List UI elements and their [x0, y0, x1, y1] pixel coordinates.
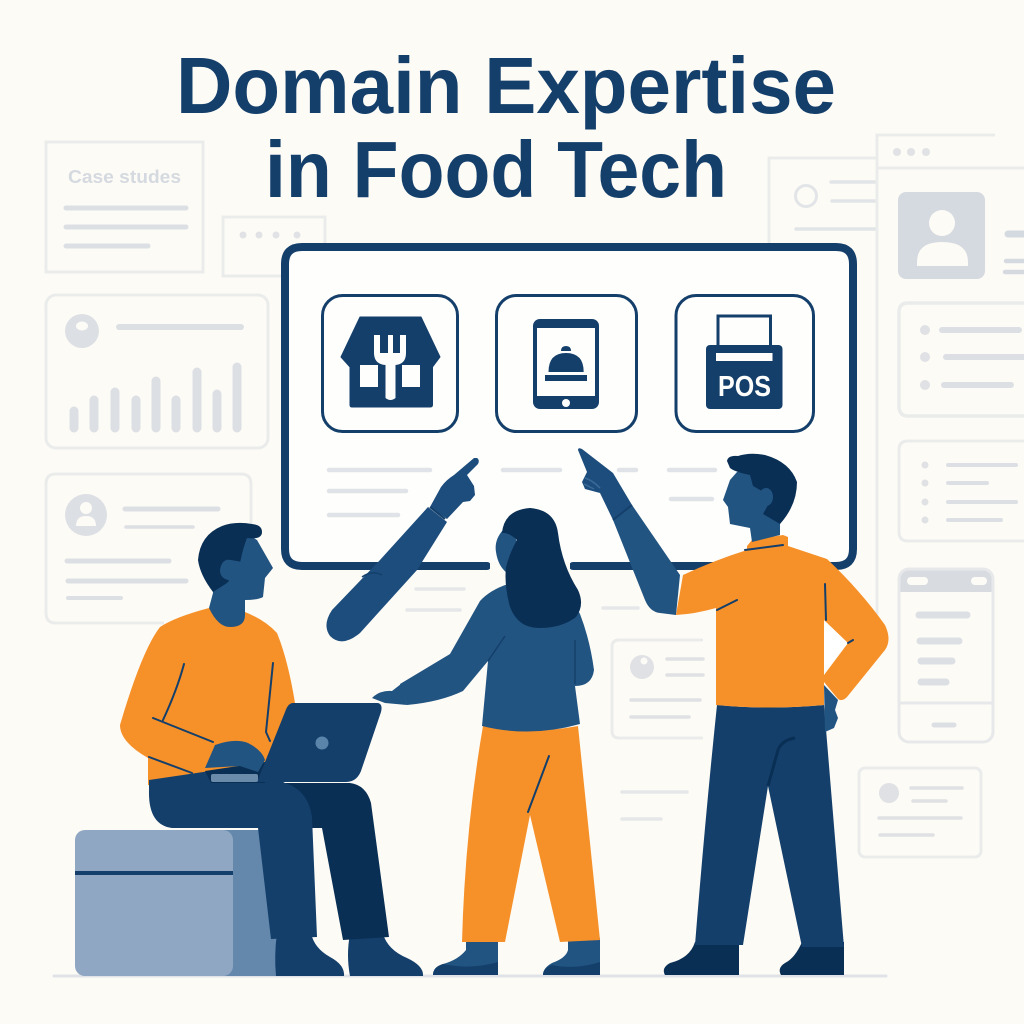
pointing hand right: [578, 448, 632, 520]
panel: bar chart card: [46, 295, 268, 448]
long hair: [502, 508, 581, 628]
panel: case studies card: [46, 142, 203, 272]
title: Domain Expertise: [176, 41, 836, 130]
panel: browser window: [877, 135, 1024, 615]
ground line: [54, 974, 886, 978]
hair: [198, 523, 262, 592]
shoes: [275, 933, 344, 976]
hand on hip: [824, 685, 838, 732]
near leg: [149, 770, 317, 939]
hand: [372, 684, 407, 705]
orange shirt: [676, 535, 888, 708]
seat cube: [75, 830, 277, 976]
orange trousers: [462, 726, 600, 942]
title: in Food Tech: [265, 125, 727, 214]
shoes: [433, 938, 498, 975]
panel: dots card: [223, 217, 325, 276]
shoes: [664, 942, 739, 975]
icon: restaurant with fork: [322, 296, 458, 432]
hand on laptop: [205, 741, 265, 772]
panel: lower right card: [859, 768, 981, 857]
title: [176, 41, 836, 214]
figure: woman: [372, 508, 600, 975]
icon: profile photo: [898, 192, 985, 279]
raised blue arm: [613, 505, 680, 615]
ear: [220, 560, 242, 585]
shirt creases: [717, 545, 853, 643]
sweater: [120, 608, 295, 785]
figure: standing man: [578, 448, 888, 975]
white gap at hip: [824, 620, 848, 675]
ear: [759, 488, 773, 506]
screen text lines: [329, 470, 715, 515]
blue top and arm: [400, 580, 594, 732]
list card 1: [899, 303, 1024, 416]
panel: profile card: [46, 474, 251, 623]
trousers: [695, 705, 844, 947]
icon: tablet with cloche: [496, 296, 636, 432]
keyboard shadow: [205, 762, 265, 783]
panel: case studies card: Case studes: [68, 166, 181, 187]
gap beneath frame: [490, 562, 570, 572]
pointing hand left: [430, 458, 479, 519]
bar chart: [74, 367, 237, 428]
figure: seated man: [120, 523, 423, 976]
panel: main screen: [285, 247, 853, 572]
panel: middle card: [612, 640, 703, 738]
sweater creases: [149, 663, 273, 773]
panel: back card right: [769, 158, 876, 245]
pointing arm left: [326, 458, 479, 641]
floating wire lines: [407, 589, 687, 819]
hair: [727, 454, 797, 524]
face: [496, 530, 520, 573]
panel: phone wireframe: [898, 569, 994, 742]
icon: POS terminal: [676, 296, 814, 432]
neck and head: [209, 530, 273, 627]
laptop: [211, 703, 382, 782]
list card 2: [899, 441, 1024, 541]
far leg: [285, 783, 389, 940]
icon: POS terminal: POS: [718, 371, 771, 403]
head and neck: [723, 470, 790, 542]
